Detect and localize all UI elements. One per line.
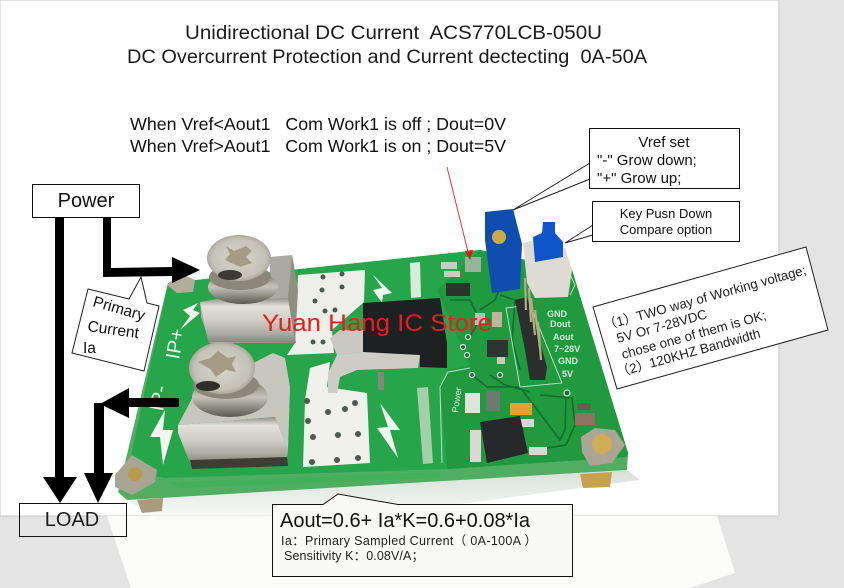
- callout: output formula: Sensitivity K：0.08V/A；: [284, 549, 424, 563]
- callout: working voltage: [593, 247, 828, 389]
- white copper pad: lower: [303, 362, 370, 467]
- watermark: Yuan Hang IC Store: [262, 310, 492, 337]
- label: Power: Power: [58, 190, 115, 212]
- title: Unidirectional DC Current ACS770LCB-050U: [185, 22, 602, 44]
- board shadow: [127, 470, 640, 522]
- pin labels: 5V: [562, 369, 573, 379]
- top screw terminal: [200, 235, 298, 343]
- milled slots: [410, 262, 433, 464]
- PCB lower edge: [118, 250, 628, 500]
- label: LOAD: [20, 504, 126, 536]
- callout: output formula: [272, 494, 572, 576]
- callout: key push down: Compare option: [620, 222, 712, 237]
- callout: output formula: Aout=0.6+ Ia*K=0.6+0.08*Ia: [280, 510, 531, 532]
- silk labels: [146, 327, 189, 413]
- current-sense chip: [328, 298, 447, 393]
- pin labels: Aout: [553, 332, 574, 342]
- white copper pad: upper: [287, 270, 365, 355]
- silk outlines: [440, 270, 575, 463]
- arrow: bottom terminal to LOAD: [84, 388, 179, 503]
- push switch: [523, 222, 572, 298]
- mounting bolts: [115, 273, 625, 495]
- callout: working voltage: chose one of them is OK;: [620, 308, 768, 362]
- callout: Vref set: Vref set: [638, 134, 690, 151]
- regulator: [470, 416, 547, 463]
- bottom screw terminal: [178, 342, 290, 469]
- right circuit section: [437, 250, 628, 469]
- photo: current sensor board: [115, 209, 640, 522]
- pin header: [515, 278, 547, 380]
- pin labels: GND: [547, 309, 568, 319]
- callout: Vref set: "+" Grow up;: [597, 170, 681, 187]
- brass standoffs: [137, 472, 612, 513]
- lightning marks: [150, 275, 400, 465]
- callout: Vref set: [513, 128, 740, 210]
- small SMD components: [441, 257, 595, 425]
- callout: primary current: Primary: [91, 294, 147, 325]
- pin labels: [547, 309, 580, 379]
- title: DC Overcurrent Protection and Current dectecting 0A-50A: [127, 46, 647, 68]
- text block: compare output states: When Vref>Aout1 Com Work1 is on ; Dout=5V: [130, 136, 506, 156]
- text block: compare output states: [130, 114, 506, 156]
- red pointer arrow: [447, 167, 473, 260]
- callout: working voltage: 5V Or 7-28VDC: [615, 306, 709, 346]
- pin labels: Dout: [550, 319, 570, 329]
- silk labels: IP-: [146, 384, 172, 413]
- callout: Vref set: "-" Grow down;: [597, 152, 697, 169]
- callout: primary current: [72, 277, 159, 371]
- arrow: power to top terminal: [103, 217, 200, 283]
- lower bevel sheen: [170, 472, 440, 488]
- callout: working voltage: （2）120KHZ Bandwidth: [615, 326, 762, 380]
- dark traces: [450, 260, 575, 450]
- title: [127, 22, 647, 68]
- callout: primary current: Ia: [83, 340, 96, 357]
- callout: primary current: Current: [86, 318, 141, 342]
- callout: key push down: Key Pusn Down: [620, 206, 712, 221]
- pin labels: 7~28V: [554, 344, 580, 354]
- silk labels: IP+: [162, 327, 189, 361]
- label: Power: [32, 184, 140, 218]
- arrow: power to LOAD: [43, 217, 77, 503]
- pad via dots: [304, 272, 361, 465]
- blue trimmer: [485, 209, 522, 293]
- label: LOAD: LOAD: [45, 509, 99, 531]
- text block: compare output states: When Vref<Aout1 Com Work1 is off ; Dout=0V: [130, 114, 506, 134]
- pin labels: GND: [558, 356, 578, 366]
- callout: output formula: Ia：Primary Sampled Current（ 0A-100A ）: [281, 534, 537, 548]
- power silk label: Power: [450, 387, 464, 413]
- callout: working voltage: （1）TWO way of Working voltage;: [602, 262, 808, 333]
- PCB top plate: [128, 250, 628, 478]
- via holes: [460, 334, 570, 396]
- callout: key push down: [565, 202, 740, 243]
